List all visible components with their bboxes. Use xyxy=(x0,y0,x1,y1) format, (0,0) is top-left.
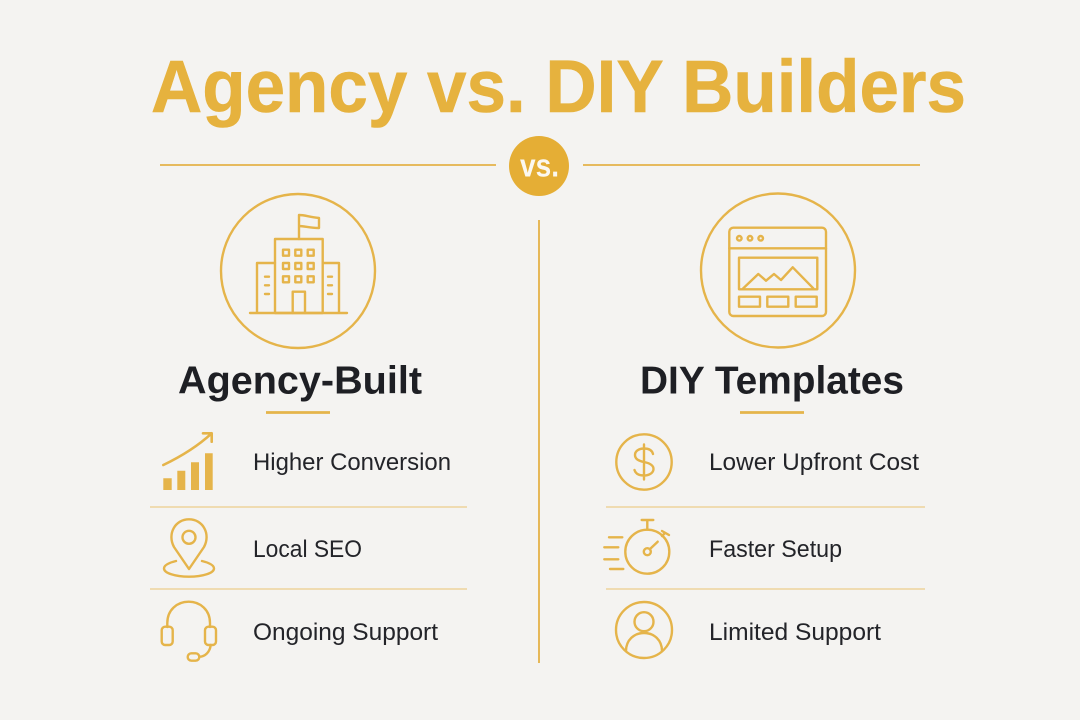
icon: stopwatch xyxy=(604,520,669,574)
icon: headset xyxy=(162,602,216,661)
vs badge xyxy=(509,136,569,196)
text: lower upfront cost: Lower Upfront Cost xyxy=(709,449,919,476)
text: limited support: Limited Support xyxy=(709,619,881,646)
vs badge: vs. xyxy=(520,148,559,184)
icon: browser window xyxy=(701,194,855,348)
icon: map pin xyxy=(164,519,214,577)
heading: agency-built: Agency-Built xyxy=(178,360,422,402)
icon: user xyxy=(616,602,672,658)
text: higher conversion: Higher Conversion xyxy=(253,449,451,476)
text: faster setup: Faster Setup xyxy=(709,536,842,563)
title: Agency vs. DIY Builders xyxy=(151,45,966,128)
icon: growth chart xyxy=(163,433,213,490)
icon: office building xyxy=(221,194,375,348)
text: ongoing support: Ongoing Support xyxy=(253,619,438,646)
heading: diy templates: DIY Templates xyxy=(640,360,904,402)
text: local seo: Local SEO xyxy=(253,536,362,563)
panel: diy templates xyxy=(604,194,925,658)
panel: agency-built xyxy=(150,194,467,661)
icon: dollar coin xyxy=(616,434,672,490)
